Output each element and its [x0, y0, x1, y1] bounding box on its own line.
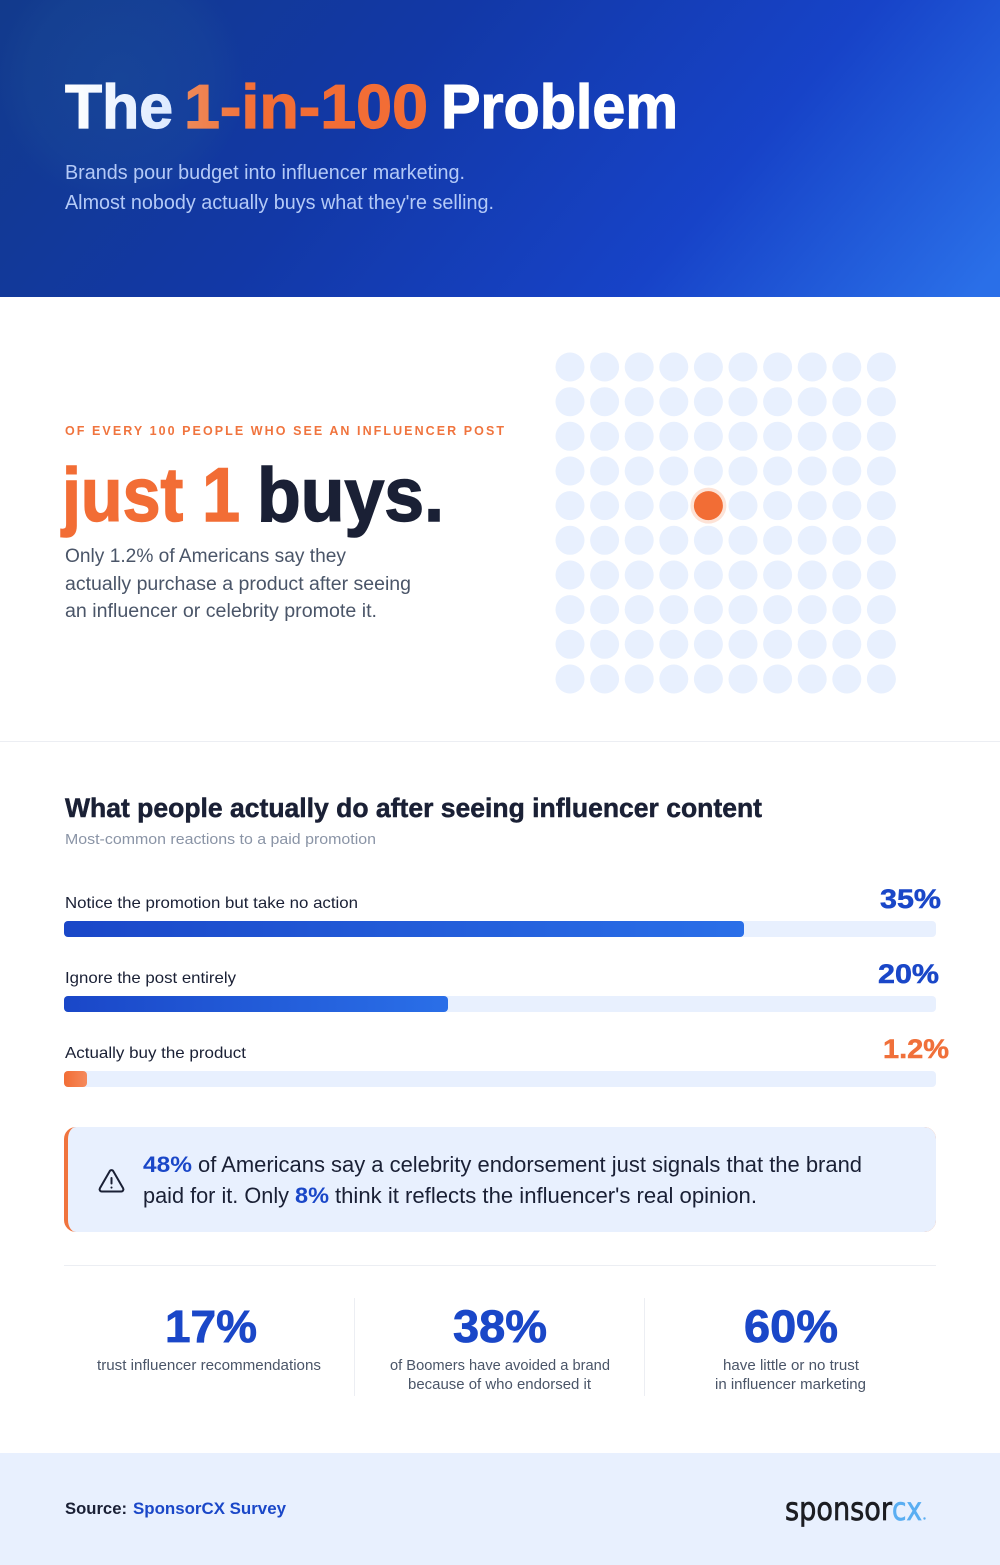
panel: header banner: [0, 0, 1000, 297]
stat: 17%: 17%: [165, 1301, 257, 1352]
stat: 60%: [715, 1301, 866, 1393]
callout: celebrity endorsement: [64, 1127, 936, 1232]
source credit: Source:: [65, 1499, 127, 1518]
panel: reactions bar chart: [64, 793, 949, 1087]
bar: buy 1.2%: Actually buy the product: [65, 1045, 247, 1062]
stat: 60%: in influencer marketing: [715, 1377, 866, 1393]
stat: 38%: of Boomers have avoided a brand: [390, 1358, 610, 1374]
bar: no action 35%: [64, 884, 941, 937]
stat: 60%: 60%: [744, 1301, 838, 1352]
title: [65, 73, 678, 142]
bar: ignore 20%: [64, 959, 939, 1012]
title: The: [65, 73, 173, 142]
stat: 38%: because of who endorsed it: [408, 1377, 591, 1393]
logo: sponsorcx: sponsor: [785, 1490, 893, 1528]
callout text: [143, 1152, 862, 1208]
stat: 38%: [390, 1301, 610, 1393]
bar: ignore 20%: Ignore the post entirely: [65, 970, 236, 987]
bar: no action 35%: Notice the promotion but take no action: [65, 895, 358, 912]
bar: ignore 20%: 20%: [878, 959, 939, 989]
bar: buy 1.2%: 1.2%: [883, 1034, 949, 1064]
stat: 60%: have little or no trust: [723, 1358, 859, 1374]
icon: warning triangle: [100, 1170, 123, 1192]
callout text: 8%: [295, 1183, 329, 1208]
section subheading: Most-common reactions to a paid promotion: [65, 831, 376, 848]
title: Problem: [441, 73, 678, 142]
stat: 17%: trust influencer recommendations: [97, 1358, 321, 1374]
eyebrow label: OF EVERY 100 PEOPLE WHO SEE AN INFLUENCER POST: [65, 424, 504, 438]
subtitle: [65, 162, 494, 214]
headline: just 1 buys: just 1: [60, 453, 240, 538]
logo: sponsorcx: cx: [892, 1490, 922, 1528]
panel: key statistics: [97, 1298, 866, 1396]
supporting paragraph: Only 1.2% of Americans say they: [65, 546, 347, 567]
supporting paragraph: actually purchase a product after seeing: [65, 574, 411, 595]
bar: no action 35%: 35%: [880, 884, 941, 914]
supporting paragraph: an influencer or celebrity promote it.: [65, 601, 377, 622]
panel: footer: [0, 1453, 1000, 1565]
bar: buy 1.2%: [64, 1034, 949, 1087]
headline: just 1 buys: [60, 453, 444, 538]
headline: just 1 buys: buys.: [257, 453, 444, 538]
title: 1-in-100: [184, 73, 428, 142]
callout text: paid for it. Only: [143, 1183, 289, 1208]
subtitle: Almost nobody actually buys what they're selling.: [65, 192, 494, 214]
callout text: think it reflects the influencer's real opinion.: [335, 1183, 757, 1208]
subtitle: Brands pour budget into influencer marketing.: [65, 162, 465, 184]
callout text: 48%: [143, 1152, 192, 1177]
source credit: SponsorCX Survey: [133, 1499, 287, 1518]
source credit: [65, 1499, 287, 1518]
stat: 38%: 38%: [453, 1301, 547, 1352]
callout text: of Americans say a celebrity endorsement just signals that the brand: [198, 1152, 862, 1177]
chart: grid of 100 people dots: [556, 352, 896, 694]
supporting paragraph: [65, 546, 411, 622]
section heading: What people actually do after seeing influencer content: [65, 793, 762, 823]
highlighted orange dot: [690, 488, 726, 524]
panel: 1 in 100 statement: [60, 424, 504, 622]
stat: 17%: [97, 1301, 321, 1374]
